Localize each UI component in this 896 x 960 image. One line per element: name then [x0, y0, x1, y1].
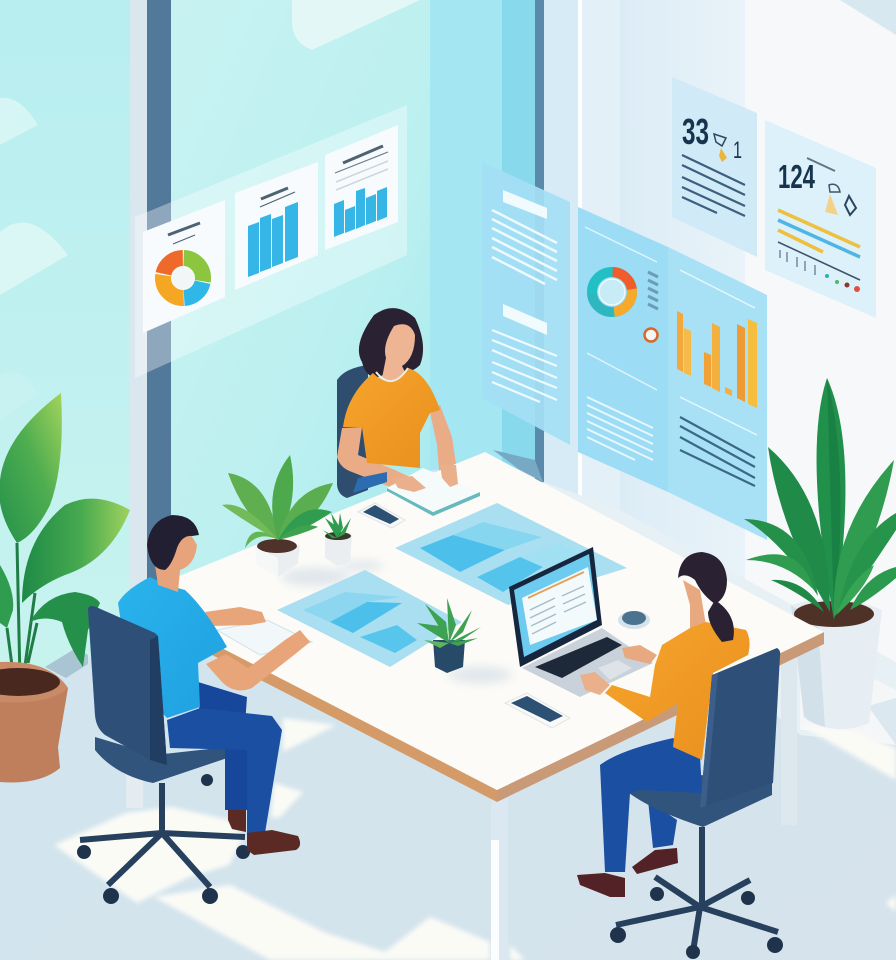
donut segments	[159, 254, 207, 302]
icon: small glyph	[714, 134, 727, 162]
notebook near man	[217, 620, 312, 655]
neck	[683, 580, 706, 628]
chair seat	[95, 737, 245, 783]
trousers	[353, 472, 387, 493]
far thigh	[198, 682, 247, 725]
arms	[337, 427, 412, 487]
sheet: table blueprint left	[277, 570, 462, 667]
near leg	[167, 708, 282, 833]
plant: big potted plant right	[744, 378, 896, 729]
sunlight patches on the floor	[54, 718, 896, 960]
icon: phone on table front	[505, 693, 570, 728]
icon: small gauge badge	[644, 328, 658, 342]
panel: wall stat card 124	[765, 120, 876, 318]
panel: translucent wall board with three report cards	[135, 105, 407, 378]
number 33: 33	[682, 111, 709, 152]
near shoe	[247, 830, 300, 855]
legend dots	[825, 274, 860, 292]
donut chart	[589, 269, 635, 315]
chair casters	[77, 774, 250, 904]
number 1: 1	[733, 137, 742, 164]
thigh and near leg	[600, 738, 702, 872]
sheet: table blueprint right	[395, 503, 627, 605]
table top	[125, 452, 824, 802]
hands of the back woman	[392, 465, 458, 492]
bars	[677, 311, 757, 408]
panel: floating donut sheet	[578, 207, 668, 492]
chair back	[700, 648, 780, 808]
table legs	[126, 600, 797, 960]
panel: floating orange bar chart sheet	[668, 247, 767, 540]
stems	[7, 543, 37, 680]
chair base	[616, 827, 778, 958]
laptop	[509, 547, 653, 697]
panel: wall stat card 33	[672, 77, 757, 257]
far shin	[648, 800, 677, 848]
hair	[359, 308, 423, 378]
hair	[147, 515, 199, 570]
plant: small table plant	[323, 513, 352, 566]
chair casters	[610, 887, 783, 959]
necklace	[376, 368, 408, 381]
plant: front table plant	[417, 598, 481, 673]
icon: round speaker puck	[618, 611, 650, 629]
window sill	[45, 648, 88, 678]
person: man on the left	[77, 515, 310, 904]
card: donut chart	[143, 200, 225, 333]
plant: large table plant	[222, 455, 333, 577]
ponytail	[708, 600, 734, 642]
near arm	[206, 630, 310, 690]
notebook near woman	[387, 465, 480, 516]
hair	[678, 552, 727, 604]
far shin	[225, 740, 249, 810]
shirt	[118, 577, 227, 718]
shadows on the table	[281, 561, 512, 683]
person: woman at back of table	[337, 308, 458, 498]
person: woman on the right	[577, 552, 783, 959]
far shoe	[632, 848, 678, 874]
leaves	[744, 378, 896, 620]
chair back	[88, 606, 167, 765]
face and neck	[382, 324, 415, 385]
far arm	[205, 607, 266, 626]
panel: floating text sheet	[482, 162, 570, 445]
chair base	[80, 783, 245, 887]
shirt	[605, 622, 750, 760]
neck and face	[155, 530, 197, 592]
card: blue bar chart	[235, 162, 318, 290]
card: bar chart with lines	[325, 125, 398, 250]
leaves	[0, 393, 130, 667]
chair seat	[625, 775, 772, 827]
far hand	[622, 645, 657, 664]
icon: warning glyphs	[825, 184, 856, 215]
near hand	[580, 672, 610, 695]
icon: phone on table back	[358, 503, 405, 528]
plant: big potted plant left	[0, 393, 130, 782]
pot	[791, 599, 882, 729]
far shoe	[228, 808, 246, 832]
shirt	[343, 368, 440, 468]
chair back	[337, 365, 368, 498]
number 124: 124	[778, 158, 815, 195]
pot	[0, 688, 68, 782]
near shoe	[577, 873, 625, 897]
